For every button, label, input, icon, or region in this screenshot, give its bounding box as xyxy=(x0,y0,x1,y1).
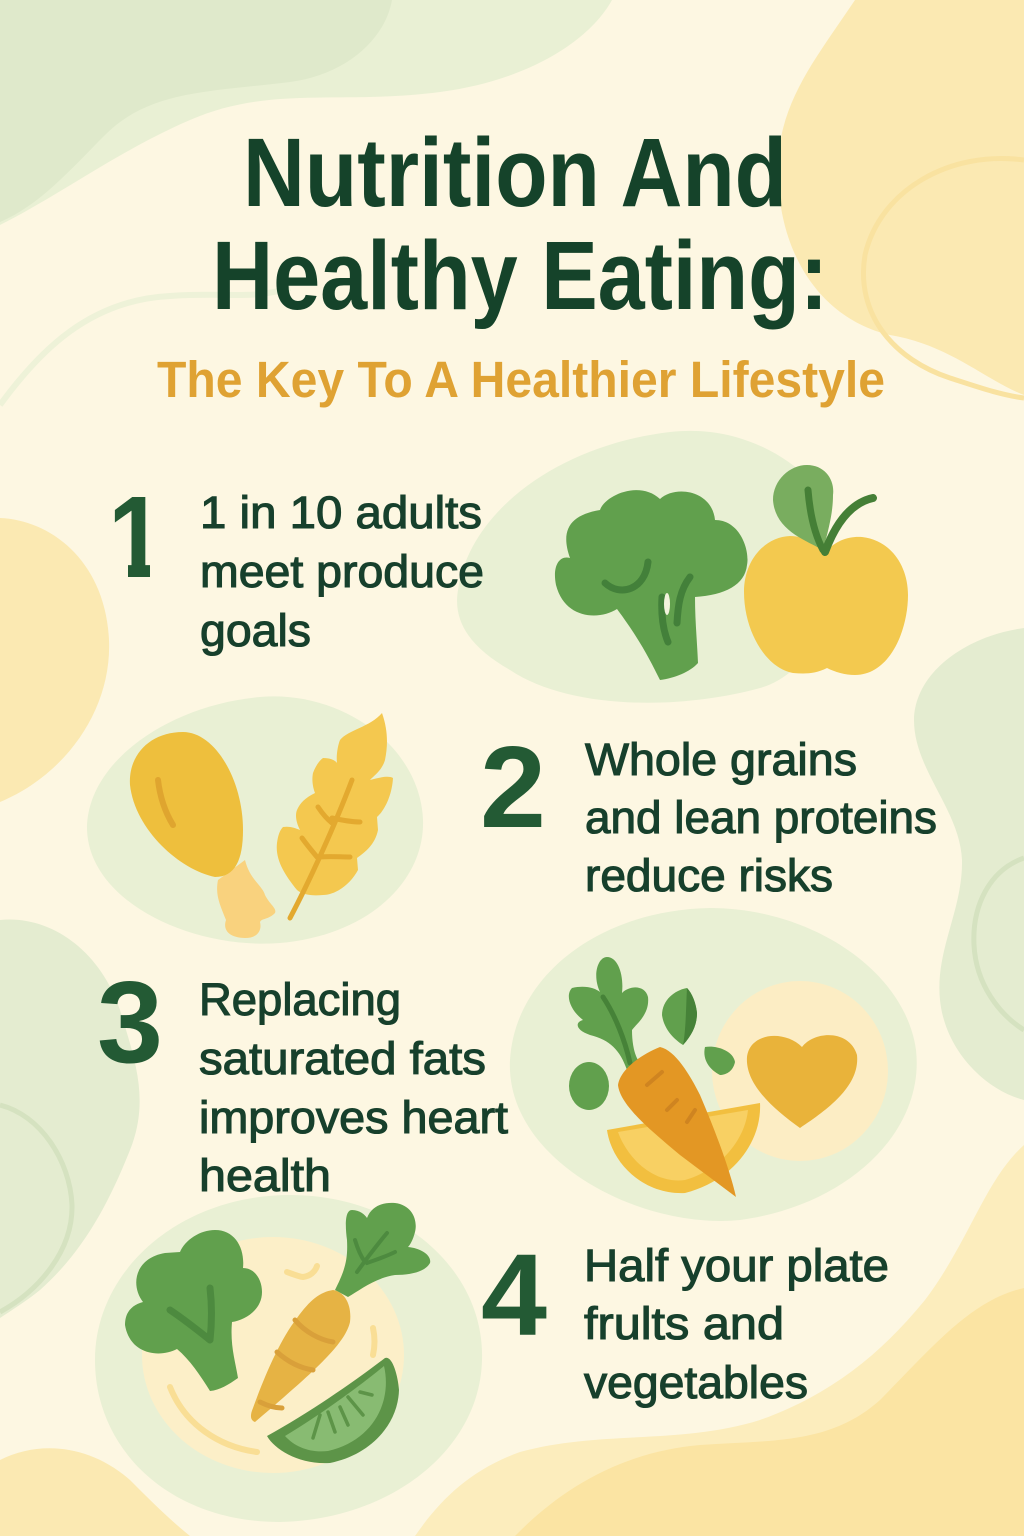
illustration: carrot, citrus and heart xyxy=(510,908,917,1221)
text: item 3: improves heart xyxy=(199,1092,509,1143)
background: top-left green blob xyxy=(0,0,612,225)
text: item 1: 1 in 10 adults xyxy=(200,487,482,538)
text: item 3 xyxy=(199,974,509,1201)
text: item 2: and lean proteins xyxy=(585,792,937,843)
panel: item 2 xyxy=(87,696,937,944)
title: Nutrition And xyxy=(243,118,787,227)
background: left yellow blob xyxy=(0,518,109,802)
text: item 4: Half your plate xyxy=(584,1240,889,1291)
background: faint green curve xyxy=(0,288,290,405)
text: item 2: reduce risks xyxy=(585,850,833,901)
panel: item 4 xyxy=(95,1195,889,1522)
text: item 4: vegetables xyxy=(584,1357,808,1408)
text: item 3: health xyxy=(199,1150,331,1201)
background: lower-left green blob xyxy=(0,920,140,1318)
text: item 2: Whole grains xyxy=(585,734,857,785)
text: item 4: frults and xyxy=(584,1298,784,1349)
panel: item 3 xyxy=(97,908,917,1221)
number 1: 1 xyxy=(108,472,164,602)
text: item 2 xyxy=(585,734,937,901)
number 3: 3 xyxy=(97,957,163,1087)
background: top-right yellow blob xyxy=(778,0,1024,398)
text: item 1: meet produce xyxy=(200,546,484,597)
subtitle: The Key To A Healthier Lifestyle xyxy=(157,351,885,408)
title xyxy=(212,118,828,330)
illustration: broccoli, carrot and cucumber xyxy=(95,1195,482,1522)
number 4: 4 xyxy=(481,1230,547,1360)
background: right green blob xyxy=(914,628,1024,1100)
text: item 3: Replacing xyxy=(199,974,401,1025)
text: item 4 xyxy=(584,1240,889,1408)
text: item 3: saturated fats xyxy=(199,1033,486,1084)
panel: item 1 xyxy=(108,431,908,703)
illustration: chicken and wheat xyxy=(87,696,423,944)
text: item 1: goals xyxy=(200,605,311,656)
text: item 1 xyxy=(200,487,484,656)
title: Healthy Eating: xyxy=(212,221,828,330)
illustration: broccoli and apple xyxy=(457,431,908,703)
number 2: 2 xyxy=(480,722,546,852)
background: bottom-right yellow blob xyxy=(415,1145,1024,1536)
background: bottom-left yellow blob xyxy=(0,1448,190,1536)
